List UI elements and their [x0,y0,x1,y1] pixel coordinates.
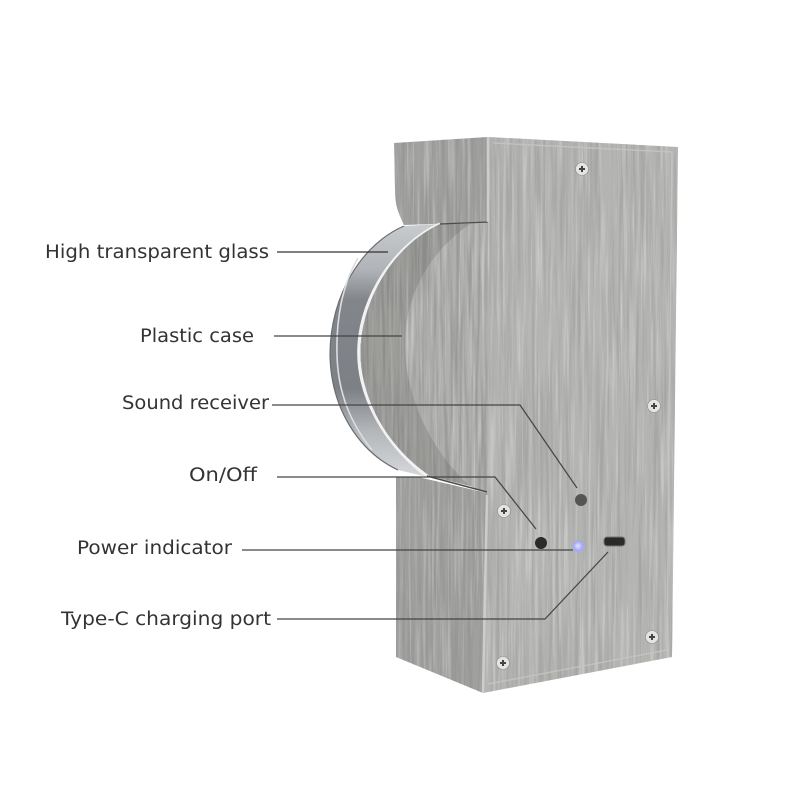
callout: On/Off [189,465,536,529]
icon: Type-C port [604,537,625,546]
callout: High transparent glass: High transparent glass [45,242,269,263]
icon: on/off button [535,537,547,549]
glass ring [330,224,440,477]
panel: product body [330,130,685,700]
callout: Type-C charging port: Type-C charging port [60,609,271,630]
icon: power indicator [570,538,586,554]
icon: screws [496,162,660,670]
plastic case curve [355,220,490,500]
callout: Sound receiver: Sound receiver [122,393,269,414]
upper side block [394,137,487,225]
front face of wood case [480,130,685,700]
lower side block [396,478,487,692]
callout: Plastic case: Plastic case [140,326,254,347]
icon: sound receiver hole [575,494,587,506]
notch shadow lines [427,222,488,492]
callout: Power indicator: Power indicator [77,538,232,559]
callout: Type-C charging port [60,552,608,630]
callout: On/Off: On/Off [189,465,258,486]
callout: Sound receiver [122,393,577,488]
corner edge [483,137,488,693]
